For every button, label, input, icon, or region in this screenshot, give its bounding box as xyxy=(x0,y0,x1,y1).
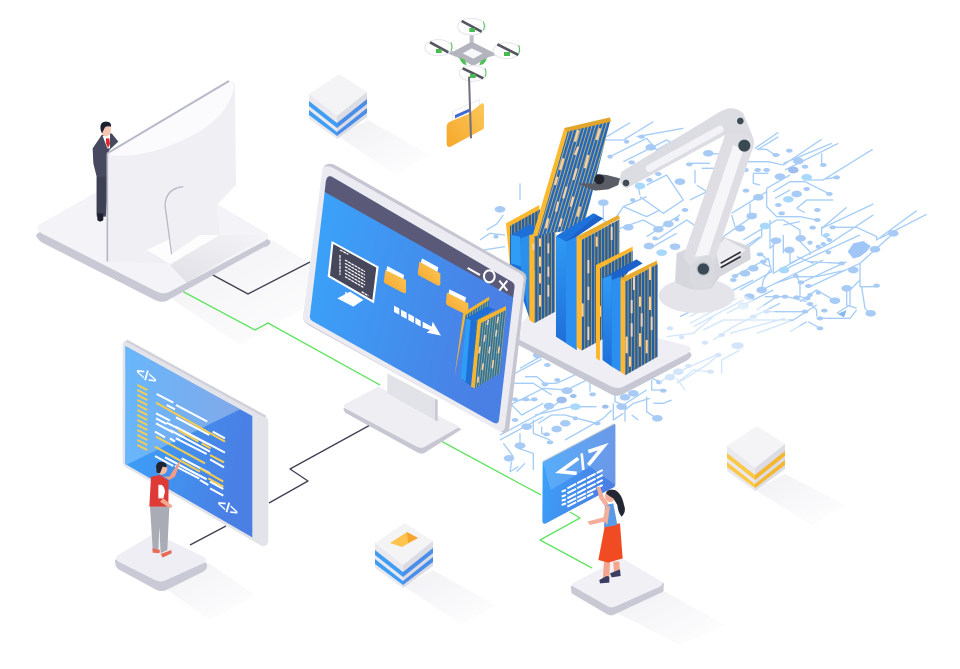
rack right front panel xyxy=(621,261,658,375)
platform xyxy=(115,534,207,591)
main monitor xyxy=(303,164,526,454)
robot base xyxy=(659,235,751,313)
developer on platform xyxy=(115,462,207,591)
monitor screen xyxy=(125,346,252,537)
rack front left xyxy=(529,232,555,323)
rack right blue xyxy=(603,259,643,372)
monitor bezel xyxy=(303,164,526,433)
storage stack: blue top xyxy=(309,74,367,139)
circuit board traces xyxy=(480,122,927,472)
back monitor platform with businessman xyxy=(36,81,270,302)
woman with code panel xyxy=(542,424,664,615)
monitor body xyxy=(123,341,268,546)
robot upper arm xyxy=(620,108,754,188)
pads: lower xyxy=(504,341,742,462)
traces: right side xyxy=(690,132,927,333)
robot forearm xyxy=(683,133,754,291)
drone rotors and frame xyxy=(425,18,520,81)
traces: middle xyxy=(480,122,780,340)
robot arm xyxy=(620,108,754,313)
traces: lower xyxy=(500,350,740,472)
drone carrying folder xyxy=(425,18,520,147)
platform xyxy=(571,558,664,615)
developer xyxy=(149,462,181,558)
woman xyxy=(587,487,625,583)
tilted rack being lifted xyxy=(533,117,611,237)
businessman xyxy=(93,122,118,222)
mini monitor icon xyxy=(328,241,379,307)
pads: middle xyxy=(493,135,770,394)
storage stack: folder top xyxy=(375,523,433,588)
connector lines xyxy=(182,262,592,568)
folder xyxy=(447,99,484,147)
code tag bottom: </> xyxy=(217,496,239,521)
monitor back xyxy=(107,81,236,264)
monitor stand and base xyxy=(343,373,462,454)
code lines yellow xyxy=(155,403,225,487)
monitor screen xyxy=(310,176,515,423)
rack back left xyxy=(506,205,547,320)
server racks xyxy=(506,117,658,375)
vent marks xyxy=(721,252,741,268)
screen glare xyxy=(125,346,240,465)
rack right back xyxy=(596,247,633,361)
pads: right side xyxy=(718,149,899,337)
code panel xyxy=(542,424,615,524)
server rack platform xyxy=(513,307,691,396)
code lines white xyxy=(155,394,225,496)
fade over circuit below robot xyxy=(660,290,835,420)
floor shadows xyxy=(160,120,845,645)
rack tall panel xyxy=(577,215,620,351)
code line numbers xyxy=(137,385,147,450)
left code monitor xyxy=(123,341,268,546)
rack tall blue xyxy=(556,213,603,350)
platform xyxy=(36,190,270,302)
code tag top: </> xyxy=(136,364,157,389)
robot gripper xyxy=(577,174,620,191)
folder icons xyxy=(384,258,468,315)
tether xyxy=(469,77,471,138)
window controls xyxy=(468,268,507,291)
transfer arrow xyxy=(394,306,441,336)
storage stack: yellow right xyxy=(727,426,785,491)
mini server rack xyxy=(454,297,506,388)
robot joints xyxy=(623,118,750,276)
